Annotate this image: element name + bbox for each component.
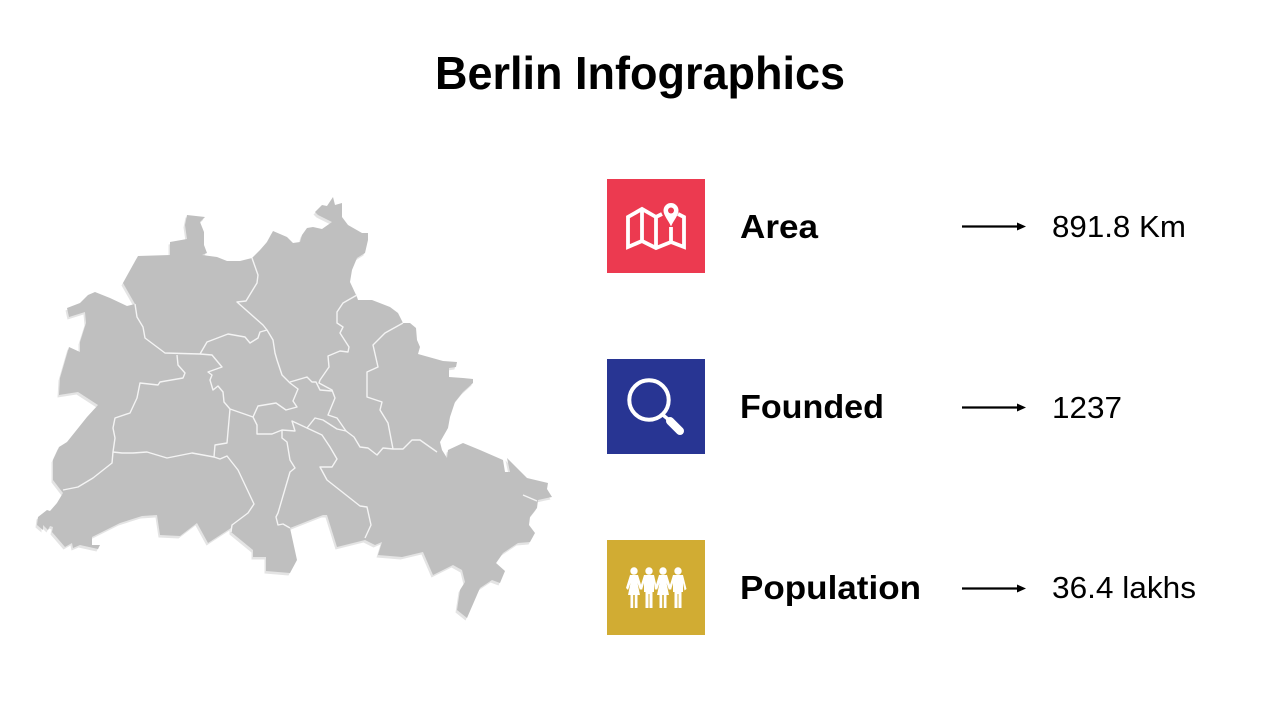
row: population (607, 540, 1196, 635)
row: area (607, 179, 1186, 273)
value: area: 891.8 Km (1052, 209, 1186, 244)
Berlin district map (36, 197, 552, 620)
row: founded (607, 359, 1122, 454)
label: area: Area (740, 208, 819, 245)
value: population: 36.4 lakhs (1052, 570, 1196, 605)
icon: four people (607, 540, 705, 635)
arrow (962, 404, 1026, 412)
icon: magnifying glass (607, 359, 705, 454)
icon: map with pin (607, 179, 705, 273)
arrow (962, 584, 1026, 592)
label: population: Population (740, 569, 921, 606)
value: founded: 1237 (1052, 390, 1122, 425)
label: founded: Founded (740, 388, 884, 425)
arrow (962, 222, 1026, 230)
title: Berlin Infographics (435, 47, 845, 99)
